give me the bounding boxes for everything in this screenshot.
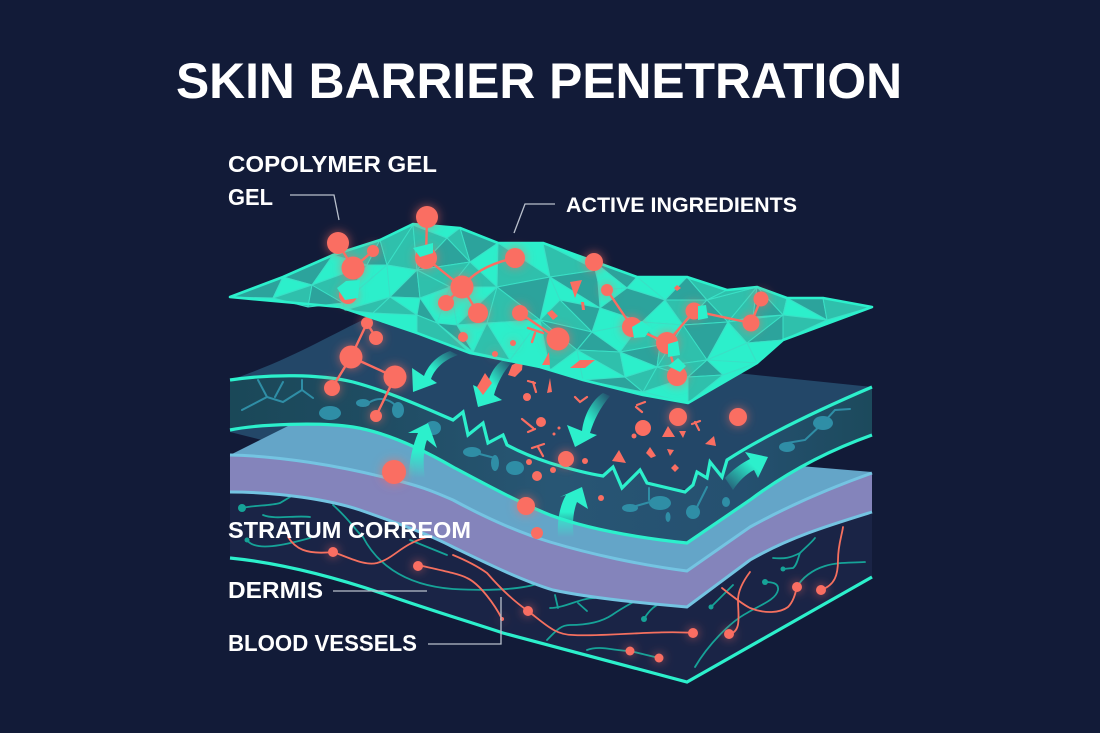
label: active ingredients: ACTIVE INGREDIENTS xyxy=(566,194,797,217)
gel chips covering the molecules xyxy=(337,243,708,372)
panel: back plane of epidermis xyxy=(230,318,872,500)
gel outline xyxy=(230,224,872,403)
gel triangles xyxy=(230,225,872,403)
label: copolymer gel: GEL xyxy=(228,184,273,210)
active ingredient molecules on the gel xyxy=(327,206,768,386)
label: dermis: DERMIS xyxy=(228,577,323,603)
panel: purple band, stratum front xyxy=(230,455,872,607)
label: copolymer gel: COPOLYMER GEL xyxy=(228,151,437,177)
label: blood vessels xyxy=(228,597,501,656)
dermis lower border xyxy=(230,558,872,682)
label: blood vessels: BLOOD VESSELS xyxy=(228,630,417,656)
label: copolymer gel xyxy=(228,151,437,220)
panel: copolymer gel mesh xyxy=(230,224,872,403)
label: stratum correom: STRATUM CORREOM xyxy=(228,517,471,543)
panel: blue band, top surface xyxy=(230,424,872,571)
cell shapes xyxy=(242,380,850,522)
blood vessels and fibres xyxy=(238,497,865,667)
layer border lines xyxy=(230,376,872,607)
arrows: penetration direction xyxy=(408,351,768,537)
label: active ingredients xyxy=(514,194,797,233)
panel: epidermis cross-section xyxy=(230,376,872,543)
molecules and particles below the gel xyxy=(324,317,747,539)
panel: dermis layer xyxy=(230,480,872,682)
gel base shape xyxy=(230,224,872,403)
title: SKIN BARRIER PENETRATION xyxy=(176,53,902,109)
coral shards on the gel xyxy=(528,280,681,368)
